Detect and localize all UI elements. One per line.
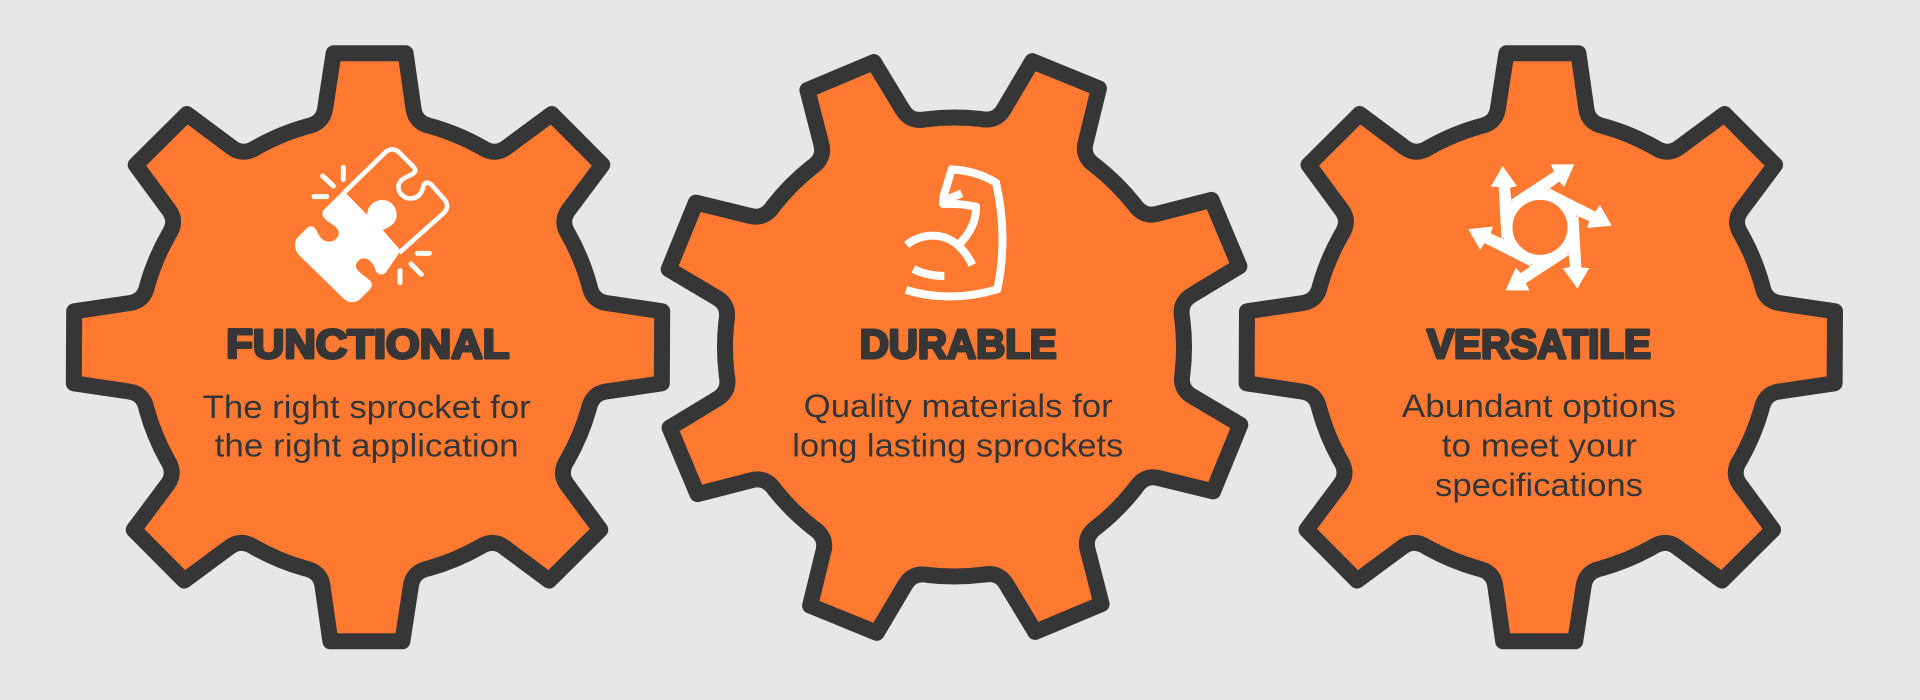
text: versatile description: to meet your (1442, 428, 1637, 464)
text: versatile description: specifications (1435, 467, 1643, 503)
icon: puzzle pieces (295, 149, 447, 302)
heading: durable: DURABLE (860, 321, 1057, 367)
icon: pinwheel of arrows around a ring (1469, 165, 1611, 290)
text: versatile description (1402, 388, 1676, 503)
heading: versatile: VERSATILE (1427, 321, 1651, 367)
text: durable description: Quality materials for (804, 388, 1113, 424)
icon: flexed arm (906, 169, 1003, 297)
text: durable description: long lasting sprockets (792, 428, 1123, 464)
panel: durable gear (571, 0, 1338, 700)
text: functional description: the right application (215, 428, 519, 464)
gear shape: durable (571, 0, 1338, 700)
text: functional description: The right sprocket for (203, 389, 531, 425)
text: durable description (792, 388, 1123, 464)
gear shape: functional (72, 53, 664, 641)
text: functional description (203, 389, 531, 464)
text: versatile description: Abundant options (1402, 388, 1676, 424)
panel: functional gear (72, 53, 664, 641)
panel: versatile gear (1245, 53, 1836, 641)
heading: functional: FUNCTIONAL (226, 321, 509, 367)
gear shape: versatile (1245, 53, 1836, 641)
